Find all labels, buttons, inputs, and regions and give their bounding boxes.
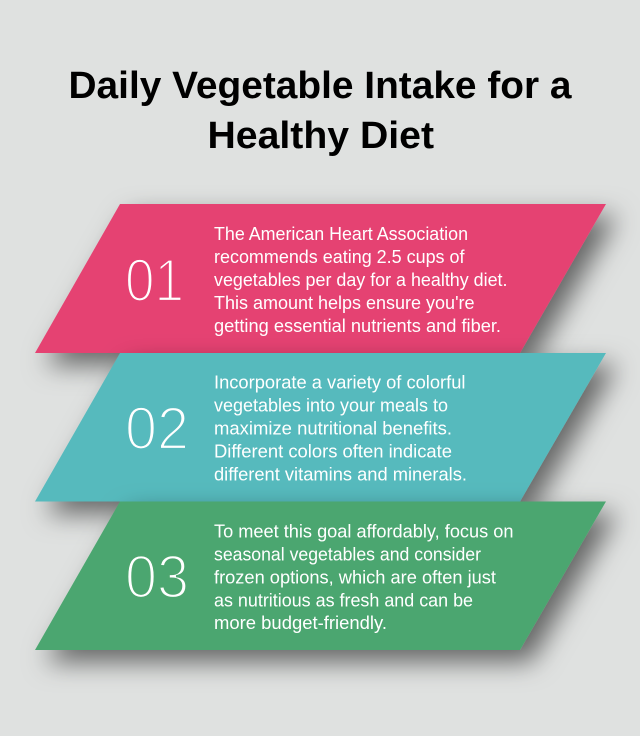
text block: step 01: recommends eating 2.5 cups of <box>214 247 465 267</box>
text block: step 03: seasonal vegetables and consider <box>214 544 481 564</box>
text block: step 01: vegetables per day for a healthy diet. <box>214 270 508 290</box>
text block: step 03: frozen options, which are often just <box>214 568 496 588</box>
pink parallelogram <box>35 204 606 353</box>
panel: step 03 <box>35 502 606 650</box>
number 01: 01 <box>125 247 184 314</box>
number 02: 02 <box>125 395 189 462</box>
text block: step 03: as nutritious as fresh and can be <box>214 590 473 610</box>
text block: step 02: maximize nutritional benefits. <box>214 418 452 438</box>
teal parallelogram <box>35 353 606 502</box>
panel: step 01 <box>35 204 606 353</box>
text block: step 02: different vitamins and minerals. <box>214 464 467 484</box>
text block: step 02 <box>214 372 467 484</box>
text block: step 01 <box>214 224 508 336</box>
text block: step 02: vegetables into your meals to <box>214 396 448 416</box>
text block: step 02: Incorporate a variety of colorful <box>214 372 466 392</box>
green parallelogram <box>35 502 606 650</box>
text block: step 01: The American Heart Association <box>214 224 468 244</box>
title: Healthy Diet <box>208 115 434 157</box>
title: Daily Vegetable Intake for a <box>68 65 572 107</box>
text block: step 01: getting essential nutrients and fiber. <box>214 316 501 336</box>
text block: step 03: To meet this goal affordably, focus on <box>214 522 514 542</box>
text block: step 02: Different colors often indicate <box>214 442 452 462</box>
text block: step 03: more budget-friendly. <box>214 613 387 633</box>
number 03: 03 <box>125 544 189 610</box>
panel: step 02 <box>35 353 606 502</box>
title <box>68 65 572 157</box>
text block: step 03 <box>214 522 514 633</box>
text block: step 01: This amount helps ensure you're <box>214 293 474 313</box>
